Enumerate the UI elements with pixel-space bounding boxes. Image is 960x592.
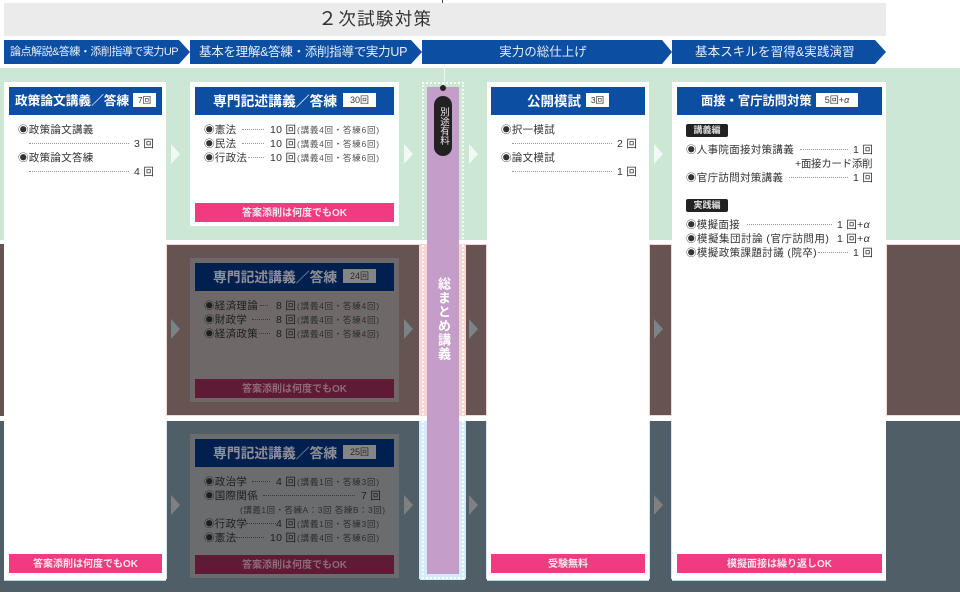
arrow: slate row 4 (654, 495, 663, 515)
chevron: step 3 (422, 40, 672, 64)
connector dot (440, 85, 446, 91)
item: 人事院面接対策講義: 1 回 (853, 144, 873, 156)
item: 憲法: (講義4回・答練6回) (297, 125, 380, 135)
card header: 政策論文講義／答練 (15, 94, 129, 108)
item: 政治学 (204, 476, 380, 488)
background band: brown (0, 244, 960, 416)
item: 行政法: (講義4回・答練6回) (297, 153, 380, 163)
item: 模擬政策課題討議: ◉模擬政策課題討議 (院卒) (686, 247, 817, 259)
pink note: 答案添削は何度でもOK (242, 560, 347, 571)
item: 経済理論: (講義4回・答練4回) (297, 301, 380, 311)
item: 政策論文答練: ◉政策論文答練 (18, 152, 94, 164)
arrow: green row 3 (469, 144, 478, 164)
item: 模擬集団討論: ◉模擬集団討論 (官庁訪問用) (686, 233, 829, 245)
connector line (444, 64, 445, 86)
item: 択一模試: ◉択一模試 (501, 124, 555, 136)
note: 国際関係 breakdown: (講義1回・答練A：3回 答練B：3回) (240, 505, 386, 515)
chevron: step 1: 論点解説&答練・添削指導で実力UP (10, 46, 178, 58)
card header (195, 263, 394, 291)
pink note: 模擬面接は繰り返しOK (727, 559, 832, 570)
arrow: brown row 3 (469, 319, 478, 339)
card header: 30回 (350, 95, 369, 105)
item: 人事院面接対策講義: ◉人事院面接対策講義 (686, 144, 794, 156)
pink note: 答案添削は何度でもOK (242, 384, 347, 395)
card header: 専門記述講義／答練 (213, 94, 337, 109)
note: 面接カード添削: +面接カード添削 (795, 158, 872, 170)
item: 官庁訪問対策講義: ◉官庁訪問対策講義 (686, 172, 783, 184)
title bar (4, 3, 886, 36)
pink note (491, 554, 645, 573)
item: 模擬政策課題討議: 1 回 (853, 247, 873, 259)
pink note: 答案添削は何度でもOK (33, 559, 138, 570)
arrow: green row 1 (171, 144, 180, 164)
pill: 別途有料: 別途有料 (438, 107, 449, 145)
card header (195, 439, 394, 467)
card header: 公開模試 (527, 94, 581, 109)
arrow: brown row 1 (171, 319, 180, 339)
dotted leader and count 1回: 1 回 (617, 166, 637, 178)
tag: 実践編: 実践編 (693, 200, 720, 210)
item: 政治学: ◉政治学 (204, 476, 247, 488)
card header: 3回 (591, 95, 604, 105)
item: 政治学: (講義1回・答練3回) (297, 477, 380, 487)
item: 官庁訪問対策講義 (686, 172, 873, 184)
card header: 面接・官庁訪問対策 (701, 94, 812, 108)
item: 憲法: 10 回 (270, 124, 296, 136)
card header: 25回 (350, 447, 369, 457)
item: 行政学: 4 回 (276, 518, 296, 530)
item: 財政学 (204, 314, 380, 326)
item: 民法 (204, 138, 380, 150)
pink note (195, 203, 394, 222)
card header (491, 87, 645, 115)
item: 経済政策: 8 回 (276, 328, 296, 340)
card header: 7回 (138, 95, 151, 105)
pill: 別途有料 (434, 96, 452, 156)
column backing: slate band (420, 421, 465, 580)
card header (195, 87, 394, 115)
item: 憲法: (講義4回・答練6回) (297, 533, 380, 543)
card: 政策論文講義／答練 (4, 82, 166, 580)
item: 財政学: 8 回 (276, 314, 296, 326)
item: 憲法 (204, 532, 380, 544)
item: 模擬集団討論: 1 回+α (837, 233, 870, 245)
item: 経済理論: ◉経済理論 (204, 300, 258, 312)
item: 経済政策: ◉経済政策 (204, 328, 258, 340)
card: 専門記述講義／答練 30回 (190, 82, 399, 226)
item: 行政法: ◉行政法 (204, 152, 247, 164)
card header (9, 87, 162, 115)
arrow: green row 2 (404, 144, 413, 164)
arrow: brown row 2 (404, 319, 413, 339)
card: 公開模試 (487, 82, 649, 580)
tag: 講義編: 講義編 (693, 125, 720, 135)
purple column: 総まとめ講義 (427, 87, 459, 574)
item: 模擬政策課題討議 (686, 247, 873, 259)
vertical label: 総まとめ講義 (436, 277, 451, 361)
pink note: 答案添削は何度でもOK (242, 208, 347, 219)
background band: green (0, 68, 960, 240)
item: 民法: (講義4回・答練6回) (297, 139, 380, 149)
item: 経済政策 (204, 328, 380, 340)
item: 憲法 (204, 124, 380, 136)
item: 国際関係: 7 回 (361, 490, 381, 502)
item: 経済理論 (204, 300, 380, 312)
arrow: brown row 4 (654, 319, 663, 339)
pink note (677, 554, 882, 573)
arrow: slate row 3 (469, 495, 478, 515)
item: 経済理論: 8 回 (276, 300, 296, 312)
card header: 24回 (350, 271, 369, 281)
pink note: 受験無料 (548, 559, 588, 570)
item: 民法: ◉民法 (204, 138, 236, 150)
dotted leader and count 2回: 2 回 (617, 138, 637, 150)
tag: 実践編 (686, 199, 728, 212)
item: 模擬面接: 1 回+α (837, 219, 870, 231)
arrow: green row 4 (654, 144, 663, 164)
item: 模擬面接 (686, 219, 870, 231)
card header (677, 87, 882, 115)
background band: slate (0, 421, 960, 592)
pink note (195, 379, 394, 398)
dimmed card: 専門記述講義／答練 25回 (190, 434, 399, 578)
item: 財政学: (講義4回・答練4回) (297, 315, 380, 325)
item: 人事院面接対策講義 (686, 144, 873, 156)
card header: 5回+α (825, 95, 849, 105)
item: 行政法 (204, 152, 380, 164)
chevron: step 3: 実力の総仕上げ (499, 45, 587, 59)
item: 行政学: ◉行政学 (204, 518, 247, 530)
item: 憲法: ◉憲法 (204, 532, 236, 544)
chevron: step 4 (672, 40, 886, 64)
item: 行政学 (204, 518, 380, 530)
chevron: step 2 (190, 40, 422, 64)
chevron: step 1 (4, 40, 190, 64)
card header: 専門記述講義／答練 (213, 446, 337, 461)
arrow: slate row 2 (404, 495, 413, 515)
pink note (9, 554, 162, 573)
item: 論文模試: ◉論文模試 (501, 152, 555, 164)
item: 民法: 10 回 (270, 138, 296, 150)
item: 憲法: 10 回 (270, 532, 296, 544)
arrow: slate row 1 (171, 495, 180, 515)
item: 行政法: 10 回 (270, 152, 296, 164)
card: 面接・官庁訪問対策 (672, 82, 886, 580)
item: 模擬面接: ◉模擬面接 (686, 219, 740, 231)
item: 国際関係: ◉国際関係 (204, 490, 258, 502)
item: 政策論文講義: ◉政策論文講義 (18, 124, 94, 136)
dotted leader and count 3回: 3 回 (134, 138, 154, 150)
item: 政治学: 4 回 (276, 476, 296, 488)
dimmed card: 専門記述講義／答練 24回 (190, 258, 399, 402)
item: 財政学: ◉財政学 (204, 314, 247, 326)
column dotted outline (422, 82, 464, 579)
item: 憲法: ◉憲法 (204, 124, 236, 136)
pink note (195, 555, 394, 574)
item: 官庁訪問対策講義: 1 回 (853, 172, 873, 184)
chevron: step 4: 基本スキルを習得&実践演習 (695, 45, 855, 59)
item: 経済政策: (講義4回・答練4回) (297, 329, 380, 339)
item: 行政学: (講義1回・答練3回) (297, 519, 380, 529)
title bar: ２次試験対策 (318, 9, 432, 30)
card header: 専門記述講義／答練 (213, 270, 337, 285)
chevron: step 2: 基本を理解&答練・添削指導で実力UP (199, 45, 407, 59)
column backing: brown band (420, 244, 465, 416)
item: 国際関係 (204, 490, 381, 502)
tag: 講義編 (686, 124, 728, 137)
dotted leader and count 4回: 4 回 (134, 166, 154, 178)
tick mark (442, 0, 443, 3)
